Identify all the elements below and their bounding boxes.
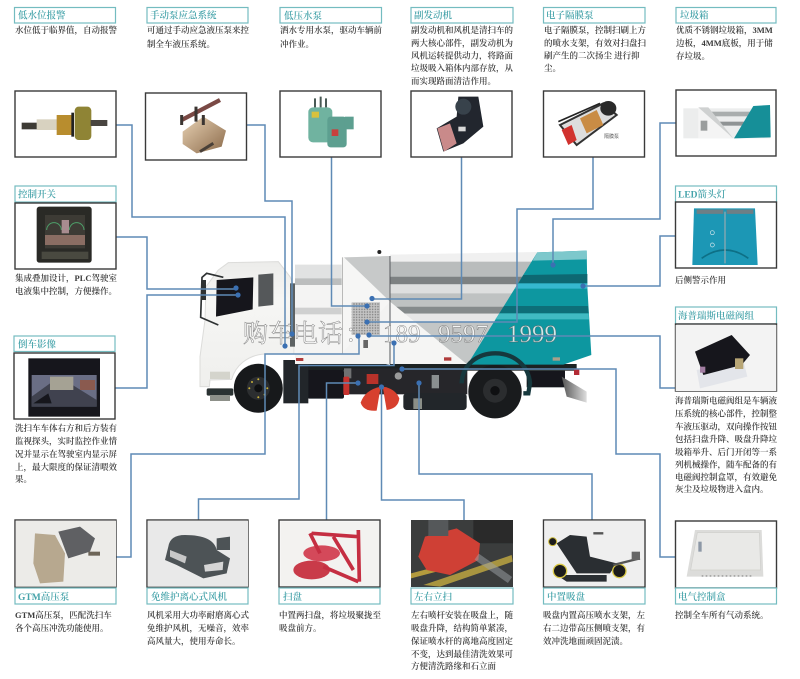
photo: suction cup	[544, 520, 645, 587]
panel: control switch	[15, 186, 118, 297]
photo: rear door	[676, 202, 776, 268]
description: 洒水专用水泵，驱动车辆前	[280, 25, 383, 36]
panel: central suction cup	[543, 520, 646, 646]
watermark: phone number: 购车电话	[243, 320, 343, 348]
heading: 副发动机	[414, 10, 453, 22]
panel: low water alarm	[14, 8, 118, 157]
description: 监视探头，实时监控作业情	[15, 436, 118, 447]
connector: side brush	[379, 384, 464, 520]
panel: sweep discs	[279, 520, 382, 633]
heading: 免维护离心式风机	[151, 591, 228, 603]
description: 况并显示在驾驶室内显示屏	[15, 449, 118, 459]
watermark: phone number	[243, 320, 557, 348]
description: 圾箱举升、后门开闭等一系	[675, 447, 778, 457]
description: 不变，达到最佳清洗效果可	[411, 649, 514, 660]
photo: control panel	[15, 203, 116, 269]
connector lines	[115, 123, 676, 557]
heading: 电气控制盒	[678, 591, 726, 603]
truck illustration	[200, 250, 591, 411]
panel: reversing camera	[14, 336, 118, 484]
cab	[200, 262, 295, 387]
description: 灰尘及垃圾物进入盒内。	[675, 484, 769, 494]
photo: bin	[676, 90, 776, 156]
heading	[280, 8, 382, 23]
panel: LED arrow light	[675, 186, 776, 285]
photo: water pump	[280, 91, 381, 157]
description: 电子隔膜泵，控制扫刷上方	[544, 25, 647, 36]
heading: 低水位报警	[18, 10, 66, 22]
description: 海普瑞斯电磁阀组是车辆液	[675, 396, 778, 406]
description: 吸盘升降，结构简单紧凑，	[411, 623, 513, 634]
description	[411, 610, 514, 671]
description: 尘。	[544, 63, 561, 73]
connector: low pressure pump	[332, 157, 370, 309]
heading	[14, 8, 116, 23]
panel: centrifugal fan	[147, 520, 250, 647]
description: 压系统的核心部件，控制整	[675, 408, 778, 420]
description: GTM高压泵，匹配洗扫车	[15, 610, 112, 621]
heading: 中置吸盘	[547, 591, 586, 603]
connector: suction cup	[416, 380, 592, 520]
description: 的喷水支架，有效对扫盘扫	[544, 38, 647, 49]
description: 高风量大，使用寿命长。	[147, 636, 241, 647]
teal rear section	[467, 251, 591, 365]
description	[543, 610, 646, 646]
description: 而实现路面清洁作用。	[411, 76, 496, 86]
description	[15, 610, 112, 633]
heading	[411, 588, 513, 604]
watermark: phone number: 9597	[438, 321, 488, 348]
rear wheel arch	[462, 353, 530, 393]
photo: float sensor	[15, 91, 116, 157]
connector: electrical box	[399, 366, 675, 557]
connector: control switch	[116, 237, 239, 291]
photo: monitor	[14, 353, 115, 419]
heading: 低压水泵	[284, 10, 323, 22]
description: 刷产生的二次扬尘 进行抑	[544, 50, 640, 60]
connector: GTM pump	[116, 333, 361, 557]
heading	[676, 8, 776, 23]
connector: diaphragm pump	[364, 157, 593, 325]
description	[147, 610, 250, 647]
description: 存垃圾。	[676, 51, 710, 61]
heading	[544, 8, 645, 23]
description: 果。	[15, 474, 32, 484]
heading	[147, 8, 248, 23]
description	[279, 610, 382, 633]
description: 副发动机和风机是清扫车的	[411, 25, 514, 35]
description: 冲作业。	[280, 39, 314, 49]
watermark: phone number: 1999	[507, 321, 557, 348]
connector: LED arrow light	[580, 236, 675, 289]
heading: 电子隔膜泵	[546, 10, 594, 22]
photo: control box	[676, 521, 776, 588]
panel: side brushes and spray	[411, 520, 514, 671]
description	[676, 25, 773, 61]
description: 后侧警示作用	[675, 275, 726, 285]
truck chassis	[207, 360, 587, 410]
heading: GTM高压泵	[18, 592, 70, 603]
description: 左右喷杆安装在吸盘上，随	[411, 610, 514, 621]
description: 电磁阀控制盒罩，有效避免	[675, 472, 778, 483]
description: 垃圾吸入箱体内部存放，从	[411, 63, 514, 74]
description: 各个高压冲洗功能使用。	[15, 623, 109, 633]
front wheel	[234, 364, 283, 413]
photo: sweep discs	[279, 520, 380, 587]
heading	[14, 336, 115, 352]
description: 洗扫车车体右方和后方装有	[15, 423, 118, 433]
description: 包括扫盘升降、吸盘升降垃	[675, 434, 778, 444]
description: 列机械操作，随车配备的有	[675, 460, 778, 470]
panel: electronic diaphragm pump	[544, 8, 647, 157]
photo: diaphragm pump	[544, 91, 644, 157]
description: 集成叠加设计，PLC驾驶室	[15, 273, 118, 284]
photo: valve group	[676, 324, 776, 391]
description: 优质不锈钢垃圾箱，3MM	[676, 25, 773, 36]
photo: hand pump	[146, 93, 246, 160]
description	[411, 25, 514, 86]
heading: 手动泵应急系统	[150, 10, 217, 22]
description: 水位低于临界值，自动报警	[15, 25, 118, 36]
description: 控制全车所有气动系统。	[675, 610, 769, 620]
watermark: phone number: ：	[345, 321, 370, 348]
description: 吸盘内置高压喷水支架，左	[543, 610, 646, 621]
connector: manual pump	[247, 125, 295, 337]
rear wheel	[468, 365, 522, 418]
photo: side brush	[411, 520, 513, 587]
panel: solenoid valve group	[675, 307, 778, 494]
photo: diaphragm pump: 隔膜泵	[604, 133, 619, 140]
panel: electrical control box	[675, 521, 776, 620]
tank body	[390, 252, 537, 364]
connector: fan	[198, 340, 397, 520]
panel: GTM high pressure pump	[15, 520, 116, 633]
description: 风机运转提供动力，将路面	[411, 50, 514, 62]
description: 电液集中控制，方便操作。	[15, 286, 117, 297]
description	[675, 396, 778, 494]
description: 保证喷水杆的离地高度固定	[411, 636, 514, 646]
heading: 倒车影像	[18, 338, 57, 350]
description: 方便清洗路缘和石立面	[411, 661, 497, 671]
watermark: phone number: 189	[383, 321, 420, 348]
connector: auxiliary engine	[369, 157, 462, 301]
description: 吸盘前方。	[279, 623, 322, 633]
description: 边板，4MM底板，用于储	[676, 38, 773, 49]
description: 两大核心部件，副发动机为	[411, 38, 514, 49]
connector: solenoid valve	[366, 332, 675, 388]
connector: low water alarm	[116, 125, 288, 349]
description: 右二边带高压侧喷支架，有	[543, 623, 646, 634]
description: 风机采用大功率耐磨离心式	[147, 610, 250, 620]
description: 免维护风机，无噪音，效率	[147, 623, 250, 634]
photo: GTM pump	[15, 520, 116, 587]
description	[15, 273, 118, 297]
description: 制全车液压系统。	[147, 39, 215, 49]
connector: refuse bin	[550, 123, 676, 268]
heading: LED箭头灯	[678, 188, 727, 200]
description: 车液压驱动，双向操作按钮	[675, 422, 778, 432]
photo: engine	[411, 91, 512, 157]
description	[544, 25, 647, 73]
panel: auxiliary engine	[411, 8, 514, 157]
description: 上，最大限度的保证清喂效	[15, 462, 118, 473]
photo: fan	[147, 520, 248, 587]
heading: 左右立扫	[414, 591, 453, 603]
panel: refuse bin	[676, 8, 776, 156]
panel: low pressure water pump	[280, 8, 383, 157]
panel: manual emergency pump	[146, 8, 250, 160]
description: 可通过手动应急液压泵来控	[147, 25, 250, 35]
heading: 垃圾箱	[680, 10, 709, 22]
heading: 控制开关	[18, 188, 57, 200]
mid body	[295, 264, 342, 364]
heading	[676, 307, 776, 324]
connector: reversing camera	[115, 292, 241, 388]
engine compartment	[296, 250, 390, 365]
heading: 扫盘	[283, 591, 303, 603]
heading	[411, 8, 513, 23]
description	[280, 25, 383, 49]
description: 效冲洗地面顽固泥渍。	[543, 636, 628, 646]
connector: sweep disc	[326, 380, 361, 520]
description: 中置两扫盘，将垃圾聚拢至	[279, 610, 382, 621]
heading: 海普瑞斯电磁阀组	[678, 310, 755, 322]
side brushes	[361, 374, 399, 411]
description	[15, 423, 118, 484]
description	[147, 25, 250, 49]
